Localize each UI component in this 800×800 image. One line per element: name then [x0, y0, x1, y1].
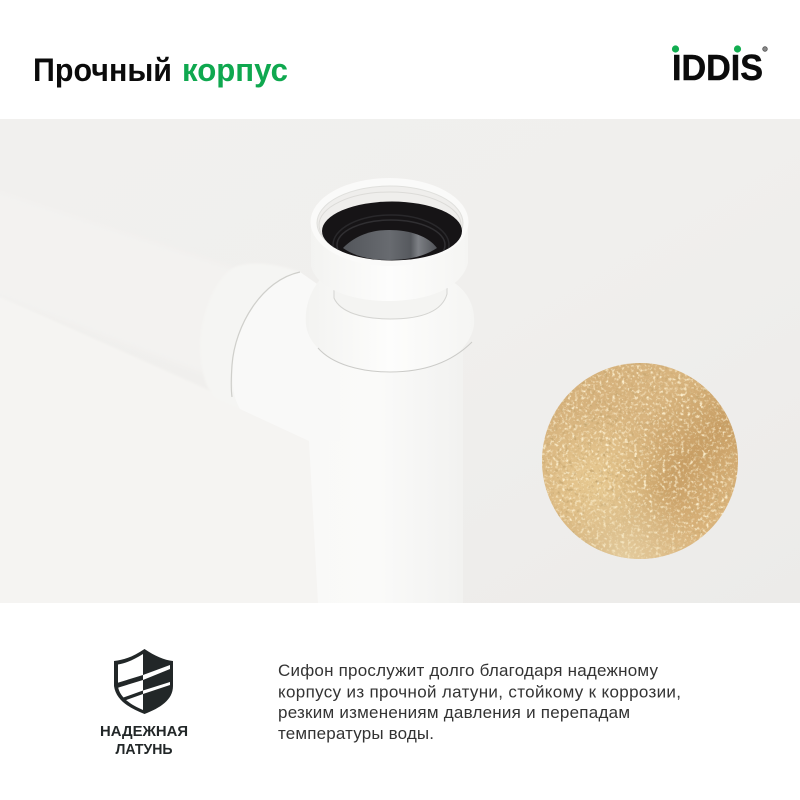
icon caption: НАДЕЖНАЯ: [100, 724, 188, 740]
icon caption: [100, 724, 188, 758]
title: [33, 52, 288, 88]
description text: резким изменениям давления и перепадам: [278, 703, 630, 722]
description text: [278, 661, 681, 743]
brass sphere: [542, 363, 738, 559]
lower collar: [318, 285, 472, 372]
neck: [334, 288, 448, 320]
horizontal drain pipe: [0, 182, 235, 374]
description text: корпусу из прочной латуни, стойкому к коррозии,: [278, 682, 681, 702]
description text: Сифон прослужит долго благодаря надежному: [278, 661, 658, 680]
icon: shield: [114, 649, 173, 714]
lower wall area: [0, 283, 320, 640]
pipe elbow body: [230, 272, 326, 436]
gasket threads: [332, 214, 450, 252]
pipe elbow collar: [200, 264, 300, 409]
vertical siphon body: [320, 364, 436, 603]
logo: IDDIS: IDDIS: [672, 47, 763, 88]
description text: температуры воды.: [278, 724, 434, 743]
title: корпус: [182, 52, 288, 88]
title: Прочный: [33, 52, 172, 88]
inner tube: [343, 230, 437, 260]
threaded cup: [310, 178, 468, 301]
black gasket: [322, 202, 462, 260]
icon caption: ЛАТУНЬ: [116, 742, 172, 758]
product photo: [0, 119, 800, 640]
